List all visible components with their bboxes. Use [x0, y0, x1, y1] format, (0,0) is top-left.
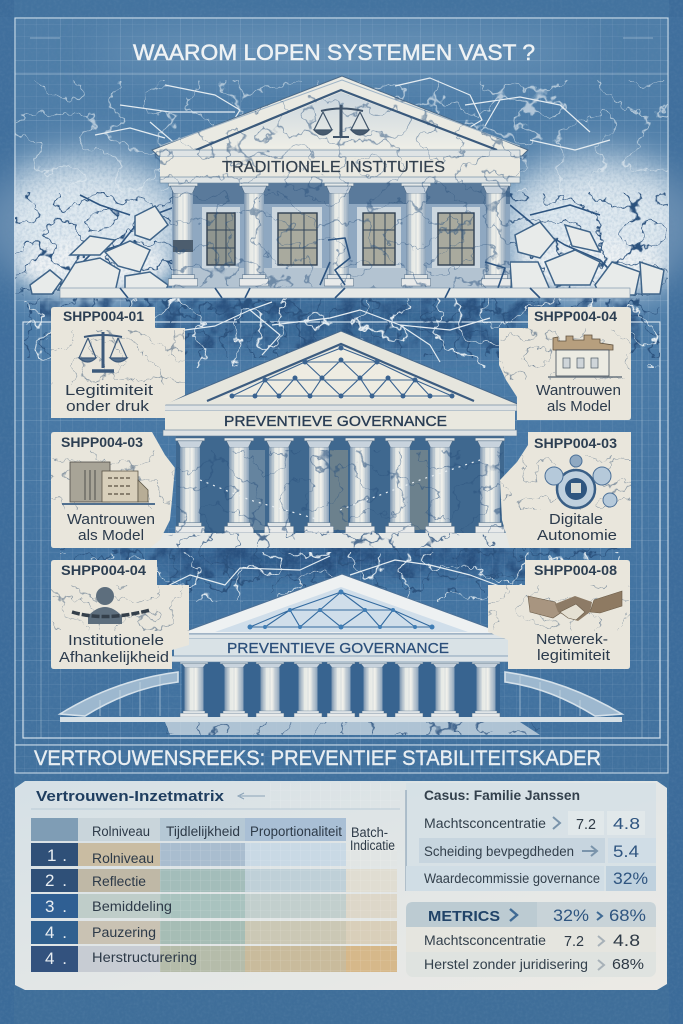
- temple: preventieve governance (lower): [60, 574, 622, 735]
- icon: handshake: [528, 591, 622, 621]
- card: SHPP004-04 top right: Wantrouwen: [536, 382, 621, 399]
- matrix table: 4 .: [45, 949, 67, 968]
- card: SHPP004-01: onder druk: [66, 398, 150, 415]
- subtitle: VERTROUWENSREEKS: PREVENTIEF STABILITEITSKADER: [34, 747, 601, 770]
- casus row 1: [424, 811, 645, 835]
- panel: metrics: Herstel zonder juridisering: [424, 957, 588, 972]
- card: SHPP004-01: SHPP004-01: [63, 309, 144, 324]
- panel: metrics: METRICS: [428, 908, 500, 925]
- casus row 1: Machtsconcentratie: [424, 816, 546, 831]
- panel: metrics: 4.8: [613, 931, 640, 950]
- columns: [180, 662, 500, 717]
- casus row 1: 7.2: [576, 816, 596, 833]
- icon: scales: [79, 332, 127, 371]
- card: SHPP004-03 left: Wantrouwen: [67, 511, 155, 528]
- card: SHPP004-08: SHPP004-08: [534, 563, 618, 578]
- dark fracture band between temples: [24, 298, 660, 602]
- entablature: [163, 405, 517, 411]
- blueprint frames: [15, 18, 668, 773]
- panel: vertrouwen-inzetmatrix: [31, 788, 400, 972]
- interior wall: [172, 180, 510, 288]
- card: SHPP004-04 bottom left: Afhankelijkheid: [59, 649, 169, 666]
- entablature: [160, 150, 520, 157]
- pediment: [152, 76, 528, 156]
- panel: metrics: 68%: [612, 956, 644, 973]
- rubble stones right: [510, 222, 664, 295]
- icon: digital gear: [545, 455, 617, 508]
- icon: tower: [548, 335, 622, 377]
- matrix table: 2 .: [45, 871, 67, 890]
- matrix table: Batch-: [351, 825, 388, 840]
- panel: metrics: [406, 902, 656, 977]
- bridge left: [60, 672, 178, 716]
- network in pediment: [248, 590, 434, 630]
- network in pediment: [230, 346, 454, 398]
- columns: [175, 438, 505, 533]
- temple heading: PREVENTIEVE GOVERNANCE: [227, 640, 449, 657]
- card: SHPP004-01: Legitimiteit: [65, 382, 154, 399]
- bridge right: [505, 672, 622, 716]
- panel: metrics: 68%: [609, 906, 646, 925]
- temple: preventieve governance (middle): [150, 331, 552, 548]
- card: SHPP004-03 right: Autonomie: [537, 527, 617, 544]
- card: SHPP004-03 left: [51, 432, 176, 548]
- matrix table: Reflectie: [92, 874, 146, 889]
- card: SHPP004-03 right: SHPP004-03: [534, 436, 618, 451]
- card: SHPP004-03 right: Digitale: [549, 511, 603, 528]
- panel: metrics: 7.2: [564, 933, 584, 950]
- windows: [202, 207, 480, 268]
- dotted network strands: [200, 460, 480, 520]
- icon: office building: [62, 462, 155, 504]
- panel: metrics: Machtsconcentratie: [424, 933, 546, 948]
- panel: casus familie janssen: Casus: Familie Janssen: [424, 788, 580, 803]
- card: SHPP004-03 right: [500, 432, 631, 548]
- arrow: [238, 793, 265, 799]
- row numbers: 1 .: [47, 846, 67, 865]
- title: WAAROM LOPEN SYSTEMEN VAST ?: [133, 40, 535, 65]
- casus row 2: [419, 838, 656, 863]
- panel: casus familie janssen: [406, 783, 656, 891]
- card: SHPP004-04 bottom left: Institutionele: [68, 632, 164, 649]
- casus row 1: 4.8: [613, 816, 640, 833]
- matrix table: Pauzering: [92, 925, 156, 940]
- matrix table: Proportionaliteit: [250, 824, 342, 839]
- row labels: Rolniveau: [92, 851, 154, 866]
- matrix table: Herstructurering: [92, 950, 197, 965]
- casus row 3: Waardecommissie governance: [424, 871, 600, 886]
- card: SHPP004-04 top right: als Model: [547, 398, 611, 415]
- casus row 2: Scheiding bevpegdheden: [424, 844, 574, 859]
- casus row 3: [406, 866, 656, 891]
- temple: traditionele instituties: [60, 76, 630, 298]
- casus row 3: 32%: [613, 869, 648, 888]
- matrix table: Indicatie: [350, 838, 395, 853]
- panel: metrics: 32%: [553, 906, 589, 925]
- sky cracks and rubble around upper temple: [15, 78, 668, 296]
- matrix table: Bemiddeling: [92, 899, 172, 914]
- masonry cracks: [152, 95, 528, 288]
- column headers: Rolniveau: [92, 824, 150, 839]
- card: SHPP004-04 bottom left: [51, 560, 189, 669]
- matrix table: 3 .: [45, 897, 67, 916]
- temple heading: PREVENTIEVE GOVERNANCE: [224, 413, 447, 430]
- floor: [60, 288, 630, 298]
- card: SHPP004-08: [488, 560, 630, 669]
- card: SHPP004-01: [51, 307, 185, 418]
- rubble stones left: [30, 206, 168, 294]
- matrix table: Tijdlelijkheid: [166, 824, 240, 839]
- temple heading: TRADITIONELE INSTITUTIES: [222, 159, 445, 176]
- card: SHPP004-04 top right: SHPP004-04: [534, 309, 618, 324]
- icon: person in chains: [72, 587, 150, 624]
- card: SHPP004-08: legitimiteit: [537, 647, 611, 664]
- pediment: [178, 574, 506, 634]
- casus row 2: 5.4: [613, 842, 639, 861]
- card: SHPP004-08: Netwerek-: [536, 631, 608, 648]
- bottom panel: [15, 781, 667, 990]
- floor: [60, 717, 622, 722]
- floor: [150, 533, 552, 548]
- pediment: [162, 331, 520, 409]
- card: SHPP004-03 left: SHPP004-03: [61, 435, 143, 450]
- matrix table: 4 .: [45, 923, 67, 942]
- columns: [168, 183, 511, 286]
- matrix table: [31, 818, 397, 972]
- card: SHPP004-03 left: als Model: [78, 527, 144, 544]
- matrix heading: Vertrouwen-Inzetmatrix: [36, 788, 225, 805]
- icon: scales of justice: [314, 105, 369, 137]
- entablature: [171, 634, 511, 639]
- card: SHPP004-04 bottom left: SHPP004-04: [61, 563, 147, 578]
- card: SHPP004-04 top right: [499, 307, 631, 420]
